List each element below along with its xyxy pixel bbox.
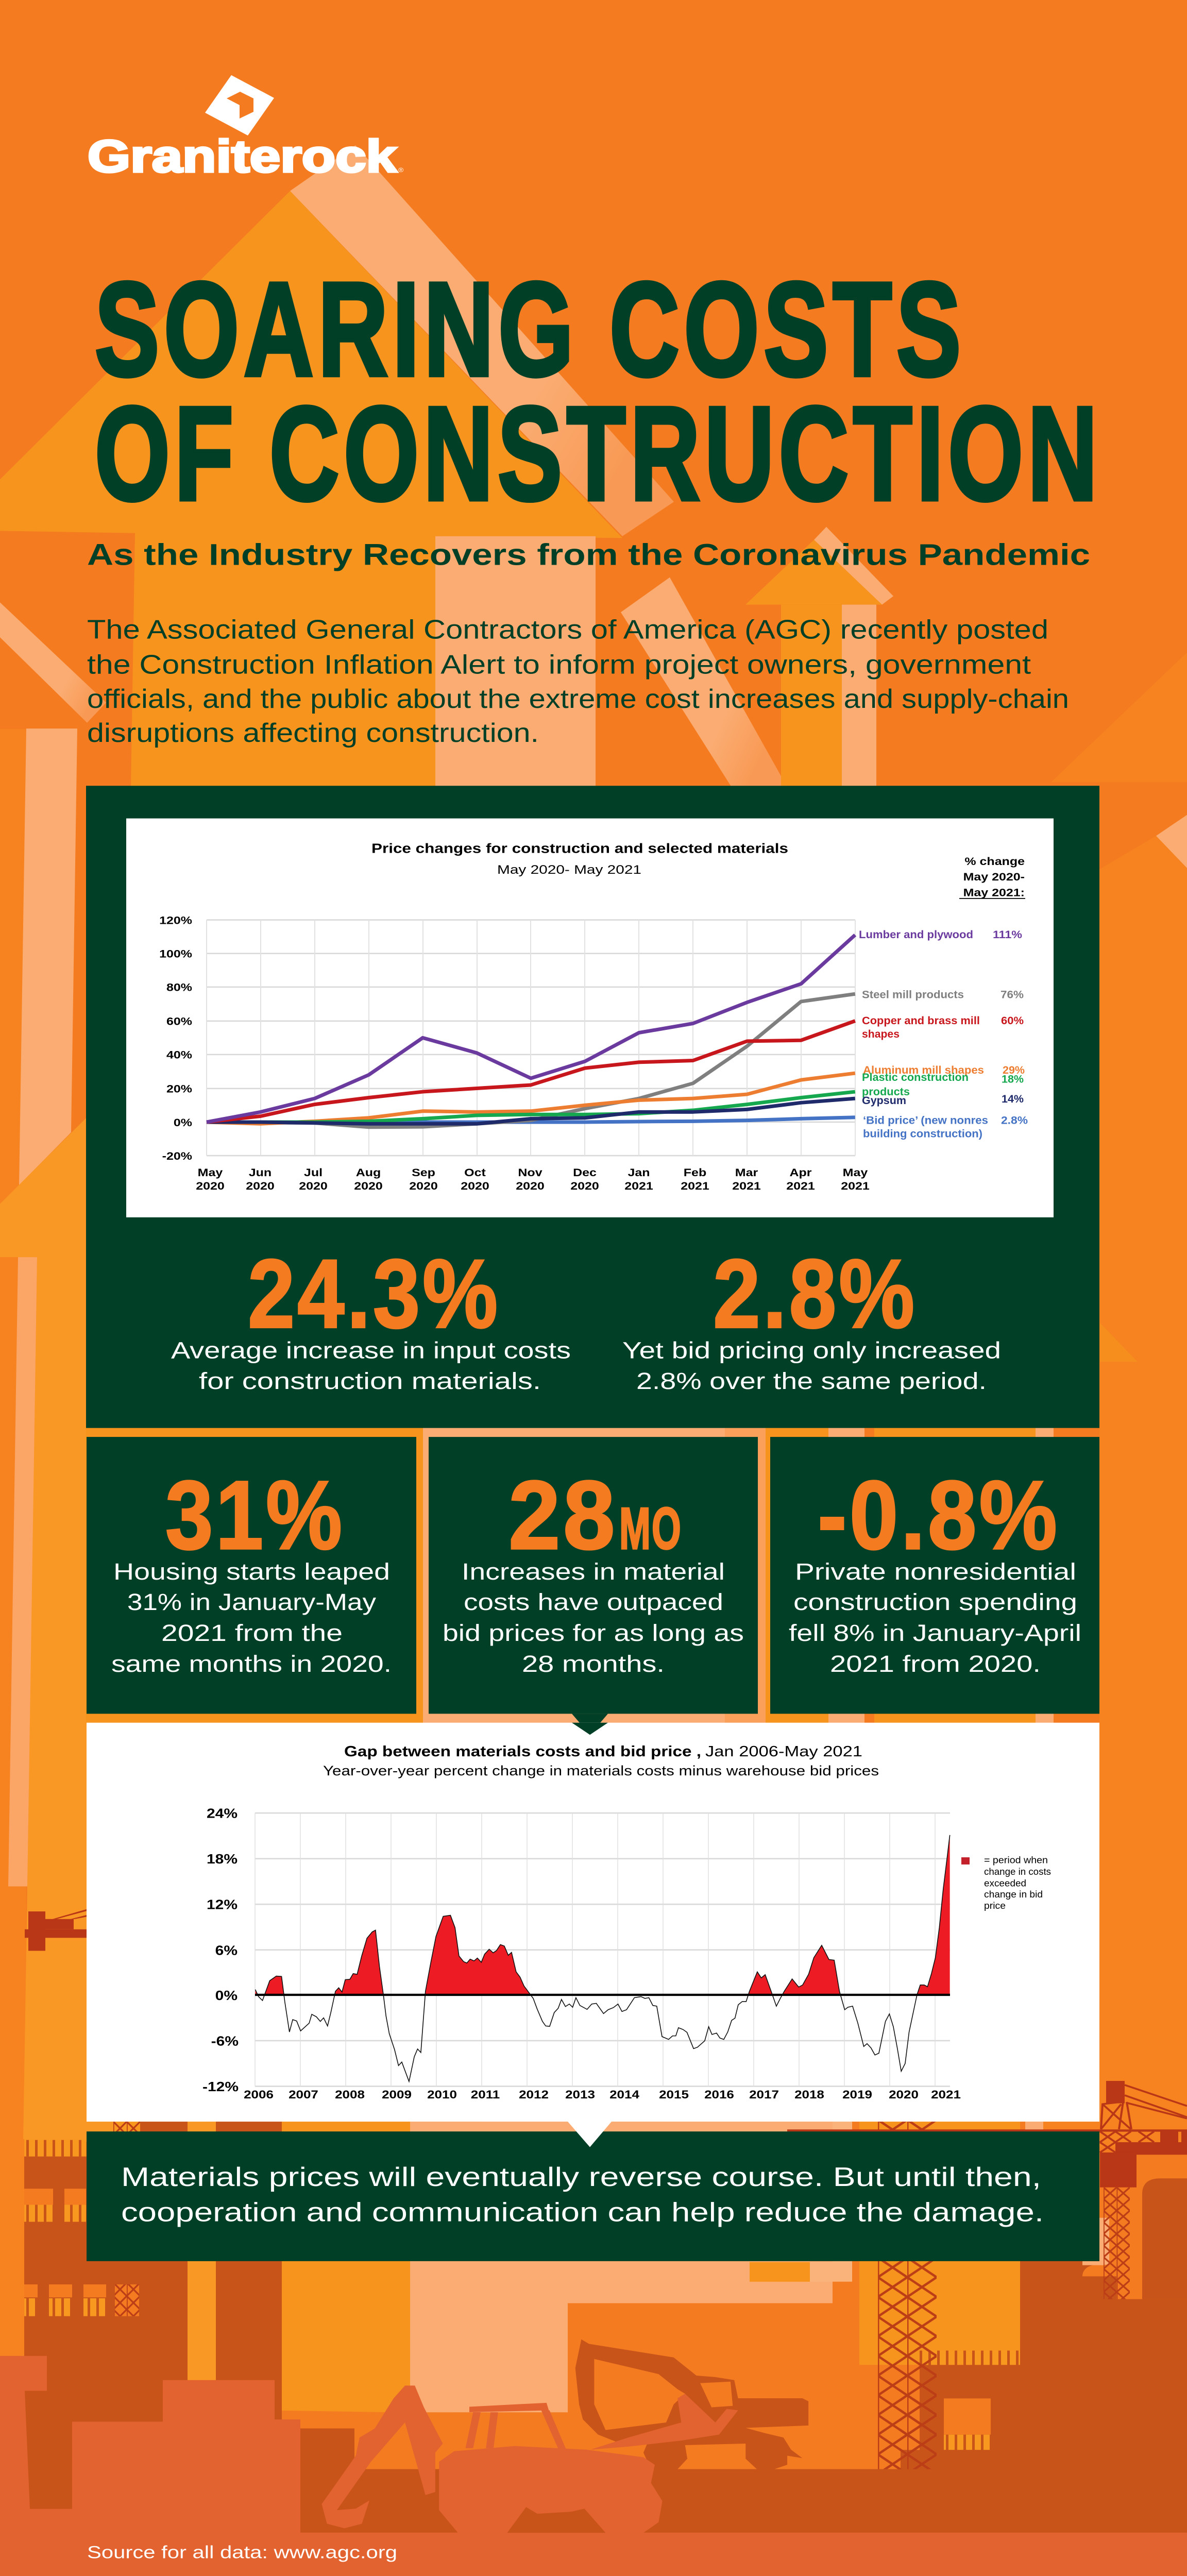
chart title (323, 1743, 879, 1779)
line chart: price changes for construction and selected materials: Jul (304, 1166, 323, 1179)
line chart: price changes for construction and selected materials: Gypsum (862, 1094, 906, 1107)
legend (961, 1855, 1051, 1911)
intro paragraph: The Associated General Contractors of America (AGC) recently posted (87, 614, 1048, 645)
line chart: price changes for construction and selected materials: 0% (174, 1116, 192, 1128)
line chart: price changes for construction and selected materials: May (843, 1166, 868, 1179)
chart title: Jan 2006-May 2021 (705, 1743, 862, 1759)
area chart: gap over time: 2006 (244, 2088, 274, 2101)
card: 28 months: 28 (508, 1461, 618, 1570)
line chart: price changes for construction and selected materials: 40% (166, 1048, 192, 1061)
card: housing starts: same months in 2020. (111, 1651, 392, 1677)
line chart: price changes for construction and selected materials: ‘Bid price’ (new nonres (863, 1114, 988, 1126)
title (95, 255, 1102, 528)
callout: closing message: cooperation and communication can help reduce the damage. (121, 2197, 1044, 2227)
line chart: price changes for construction and selected materials: Oct (464, 1166, 486, 1179)
area chart: gap over time: 18% (207, 1852, 238, 1867)
line chart: price changes for construction and selected materials: Aug (356, 1166, 381, 1179)
line chart: price changes for construction and selected materials: May 2020- May 2021 (497, 862, 641, 877)
line chart: price changes for construction and selected materials: Price changes for construction and selected materials (371, 841, 788, 856)
legend: change in costs (984, 1867, 1051, 1877)
area chart: gap over time: 2011 (471, 2088, 500, 2101)
chart title: Year-over-year percent change in materials costs minus warehouse bid prices (323, 1764, 879, 1779)
stat: 2.8 percent (622, 1240, 1001, 1394)
area chart: gap over time: 2010 (427, 2088, 457, 2101)
intro paragraph: disruptions affecting construction. (87, 718, 539, 748)
line chart: price changes for construction and selected materials: Mar (735, 1166, 758, 1179)
icon: excavator silhouette (575, 2340, 808, 2470)
line chart: price changes for construction and selected materials: Steel mill products (862, 988, 964, 1001)
line chart: price changes for construction and selected materials: 2020 (461, 1180, 489, 1192)
card: 28 months: Increases in material (462, 1559, 725, 1585)
line chart: price changes for construction and selected materials: 2020 (246, 1180, 275, 1192)
area chart: gap over time: 2019 (842, 2088, 872, 2101)
source note: Source for all data: www.agc.org (87, 2542, 397, 2562)
panel: gap between materials costs and bid price chart (87, 1723, 1099, 2122)
card: private nonresidential spending: fell 8% in January-April (789, 1620, 1081, 1646)
line chart: price changes for construction and selected materials: 14% (1002, 1092, 1024, 1105)
area chart: gap over time: 2020 (889, 2088, 919, 2101)
area chart: gap over time: 2014 (609, 2088, 639, 2101)
area chart: gap over time: 2017 (749, 2088, 779, 2101)
line chart: price changes for construction and selected materials: 2020 (570, 1180, 599, 1192)
card: 28 months: 28 months. (522, 1651, 665, 1677)
line chart: price changes for construction and selected materials: Jan (628, 1166, 650, 1179)
line chart: price changes for construction and selected materials: 2021 (841, 1180, 870, 1192)
logo: Graniterock: Graniterock (88, 131, 397, 182)
card: private nonresidential spending: -0.8% (818, 1461, 1060, 1570)
line chart: price changes for construction and selected materials: shapes (862, 1027, 900, 1040)
card: 28 months: bid prices for as long as (443, 1620, 744, 1646)
area chart: gap over time: 2008 (335, 2088, 365, 2101)
line chart: price changes for construction and selected materials: % change (964, 855, 1025, 867)
stat: 2.8 percent: 2.8% over the same period. (636, 1368, 987, 1394)
legend: exceeded (984, 1878, 1026, 1889)
card: 28 months (429, 1437, 758, 1735)
line chart: price changes for construction and selected materials: May 2020- (963, 871, 1025, 883)
area chart: gap over time: 12% (207, 1897, 238, 1912)
line chart: price changes for construction and selected materials: 2020 (196, 1180, 225, 1192)
line chart: price changes for construction and selected materials: 80% (166, 981, 192, 993)
area chart: gap over time: 2009 (382, 2088, 412, 2101)
line chart: price changes for construction and selected materials: 2021 (681, 1180, 709, 1192)
line chart: price changes for construction and selected materials: Nov (518, 1166, 542, 1179)
panel: price changes and headline stats (86, 786, 1099, 1428)
area chart: gap over time: 2013 (565, 2088, 595, 2101)
callout: closing message (87, 2122, 1099, 2261)
area chart: gap over time: 0% (215, 1988, 238, 2003)
line chart: price changes for construction and selected materials: 2021 (732, 1180, 761, 1192)
area chart: gap over time: 2018 (794, 2088, 824, 2101)
line chart: price changes for construction and selected materials: Plastic construction (862, 1071, 969, 1083)
line chart: price changes for construction and selected materials: 100% (159, 947, 192, 960)
line chart: price changes for construction and selected materials: 2020 (516, 1180, 545, 1192)
line chart: price changes for construction and selected materials: May (198, 1166, 223, 1179)
line chart: price changes for construction and selected materials: 120% (159, 914, 192, 926)
background: construction site scene (24, 2122, 1187, 2535)
intro paragraph: the Construction Inflation Alert to inform project owners, government (87, 649, 1031, 679)
line chart: price changes for construction and selected materials: Lumber and plywood (859, 928, 973, 941)
line chart: price changes for construction and selected materials: Sep (412, 1166, 435, 1179)
line chart: price changes for construction and selected materials: 2.8% (1001, 1114, 1028, 1126)
stat: 24.3 percent: 24.3% (248, 1240, 500, 1348)
stat: 24.3 percent (171, 1240, 571, 1394)
logo: Graniterock (88, 75, 404, 182)
line chart: price changes for construction and selected materials: Copper and brass mill (862, 1014, 980, 1026)
card: 28 months: costs have outpaced (464, 1589, 723, 1615)
line chart: price changes for construction and selected materials: building construction) (863, 1127, 982, 1140)
card: private nonresidential spending (770, 1437, 1099, 1714)
stat: 24.3 percent: for construction materials. (199, 1368, 541, 1394)
card: private nonresidential spending: Private nonresidential (795, 1559, 1076, 1585)
line chart: price changes for construction and selected materials: 20% (166, 1082, 192, 1095)
line chart: price changes for construction and selected materials: 111% (993, 928, 1022, 941)
line chart: price changes for construction and selected materials: Jun (249, 1166, 272, 1179)
intro paragraph (87, 614, 1069, 748)
card: 28 months: MO (619, 1496, 682, 1562)
icon: left tower crane jib (25, 1909, 87, 1951)
chart title: Gap between materials costs and bid price , (344, 1743, 701, 1759)
area chart: gap over time: 2021 (931, 2088, 961, 2101)
card: private nonresidential spending: 2021 from 2020. (830, 1651, 1041, 1677)
area chart: gap over time: 6% (215, 1943, 238, 1958)
line chart: price changes for construction and selected materials: Apr (789, 1166, 812, 1179)
icon: backhoe loader silhouette (321, 2385, 738, 2533)
line chart: price changes for construction and selected materials: May 2021: (963, 886, 1025, 899)
card: housing starts: 31% (165, 1461, 345, 1570)
line chart: price changes for construction and selected materials: 76% (1001, 988, 1024, 1001)
area chart: gap over time: -6% (211, 2033, 239, 2048)
line chart: price changes for construction and selected materials (126, 819, 1054, 1217)
line chart: price changes for construction and selected materials: 2020 (409, 1180, 438, 1192)
card: private nonresidential spending: construction spending (793, 1589, 1077, 1615)
card: housing starts (87, 1437, 416, 1714)
area chart: gap over time: -12% (202, 2079, 239, 2094)
area chart: gap over time (202, 1806, 961, 2101)
subtitle: As the Industry Recovers from the Coronavirus Pandemic (87, 538, 1090, 571)
line chart: price changes for construction and selected materials: 2020 (299, 1180, 328, 1192)
line chart: price changes for construction and selected materials: Aluminum mill shapes (863, 1064, 984, 1076)
line chart: price changes for construction and selected materials: 60% (1001, 1014, 1024, 1026)
legend: = period when (984, 1855, 1048, 1866)
area chart: gap over time: 2012 (519, 2088, 549, 2101)
area chart: gap over time: 2016 (704, 2088, 734, 2101)
intro paragraph: officials, and the public about the extreme cost increases and supply-chain (87, 684, 1069, 714)
area chart: gap over time: 24% (207, 1806, 238, 1821)
legend: price (984, 1901, 1006, 1911)
line chart: price changes for construction and selected materials: 29% (1003, 1064, 1025, 1076)
line chart: price changes for construction and selected materials: products (862, 1085, 910, 1098)
area chart: gap over time: 2015 (659, 2088, 689, 2101)
stat: 2.8 percent: 2.8% (713, 1240, 917, 1348)
card: housing starts: Housing starts leaped (113, 1559, 390, 1585)
line chart: price changes for construction and selected materials: 2021 (624, 1180, 653, 1192)
card: housing starts: 2021 from the (161, 1620, 343, 1646)
background: foreground coral wall and ground (0, 2356, 1187, 2576)
legend: change in bid (984, 1889, 1043, 1900)
line chart: price changes for construction and selected materials: 2020 (354, 1180, 383, 1192)
line chart: price changes for construction and selected materials: Dec (573, 1166, 597, 1179)
line chart: price changes for construction and selected materials: 2021 (786, 1180, 815, 1192)
callout: closing message: Materials prices will eventually reverse course. But until then, (121, 2162, 1041, 2192)
line chart: price changes for construction and selected materials: -20% (162, 1149, 192, 1162)
stat: 2.8 percent: Yet bid pricing only increased (622, 1337, 1001, 1363)
card: housing starts: 31% in January-May (127, 1589, 377, 1615)
line chart: price changes for construction and selected materials: 18% (1002, 1073, 1024, 1085)
line chart: price changes for construction and selected materials: 60% (166, 1015, 192, 1027)
logo: Graniterock: ® (398, 166, 404, 174)
icon: right tower crane (787, 2081, 1187, 2188)
area chart: gap over time: 2007 (289, 2088, 318, 2101)
stat: 24.3 percent: Average increase in input costs (171, 1337, 571, 1363)
line chart: price changes for construction and selected materials: Feb (684, 1166, 706, 1179)
